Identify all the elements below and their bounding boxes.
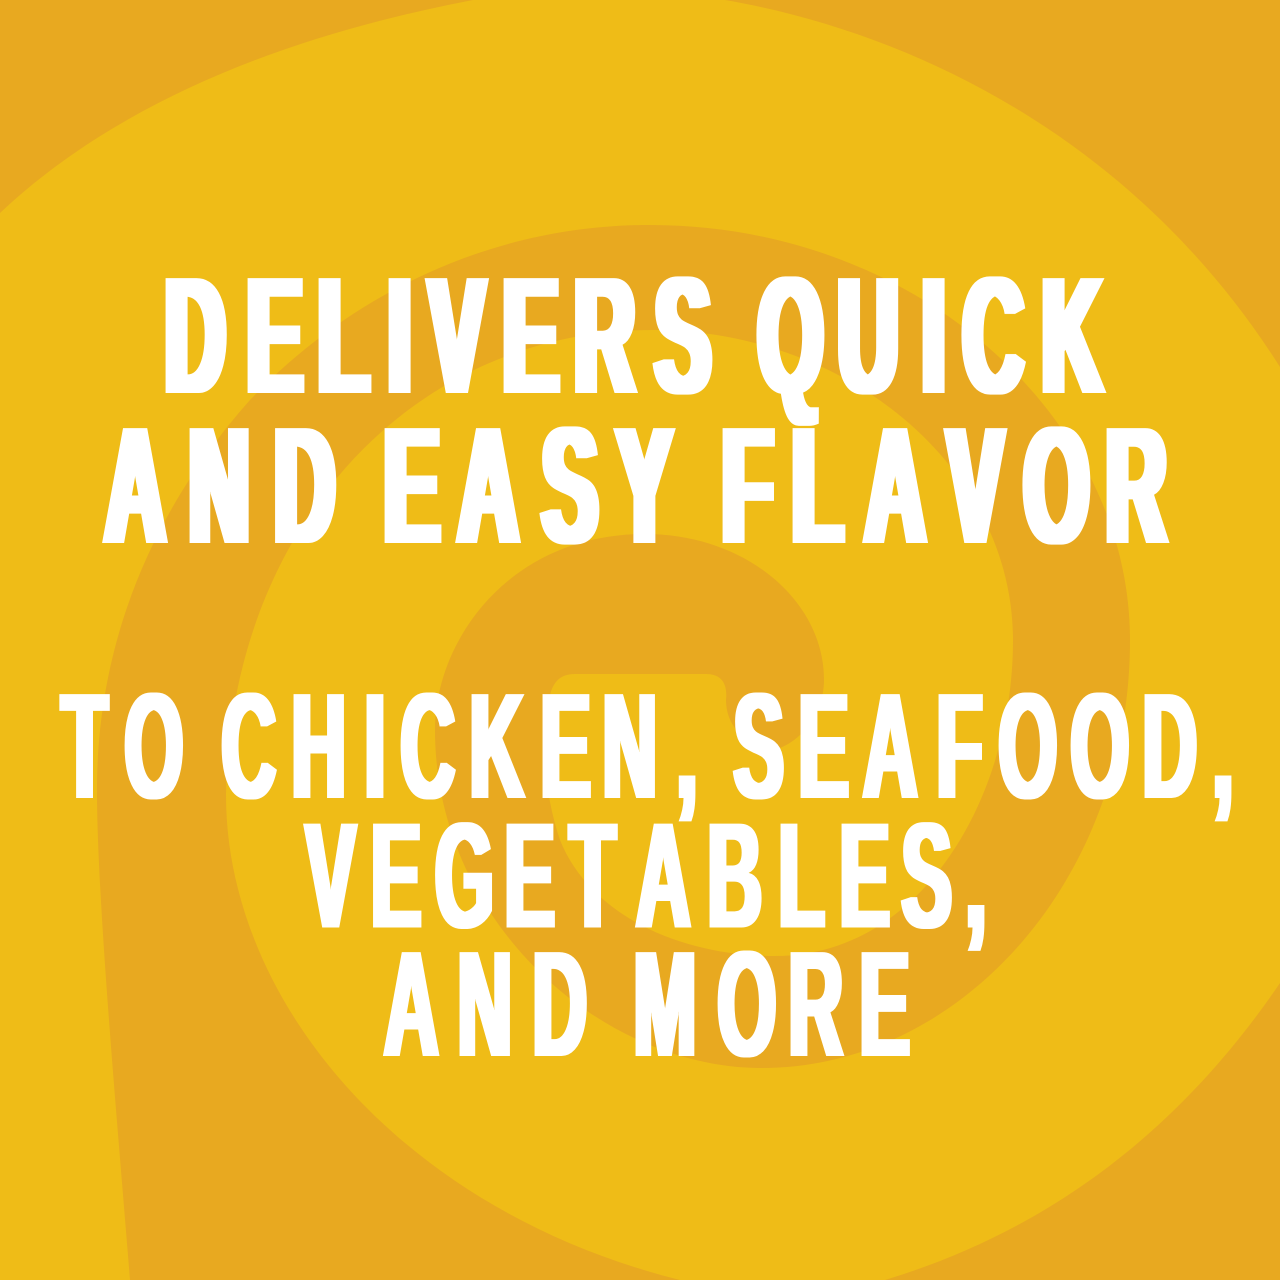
heading: delivers quick and easy flavor [105,241,1166,578]
subheading line 1: CHICKEN, [222,663,697,831]
subheading line 1 [62,663,1233,831]
heading line 2: AND [105,391,335,578]
heading line 2: EASY [384,391,672,578]
heading line 1: DELIVERS [165,241,711,428]
spiral band [97,225,1130,1280]
top-right corner shape [725,0,1280,367]
top-left corner shape [0,0,473,213]
subheading line 3: AND [384,921,587,1089]
heading line 2 [105,391,1166,578]
subheading line 1: SEAFOOD, [734,663,1233,831]
heading line 1: QUICK [758,241,1102,428]
bottom-right corner shape [885,983,1280,1280]
heading line 2: FLAVOR [722,391,1166,578]
subheading line 1: TO [62,663,183,831]
subheading: to chicken, seafood, vegetables, and more [62,663,1233,1089]
subheading line 2: VEGETABLES, [306,792,986,960]
heading line 1 [165,241,1102,428]
subheading line 3 [384,921,910,1089]
subheading line 3: MORE [634,921,910,1089]
